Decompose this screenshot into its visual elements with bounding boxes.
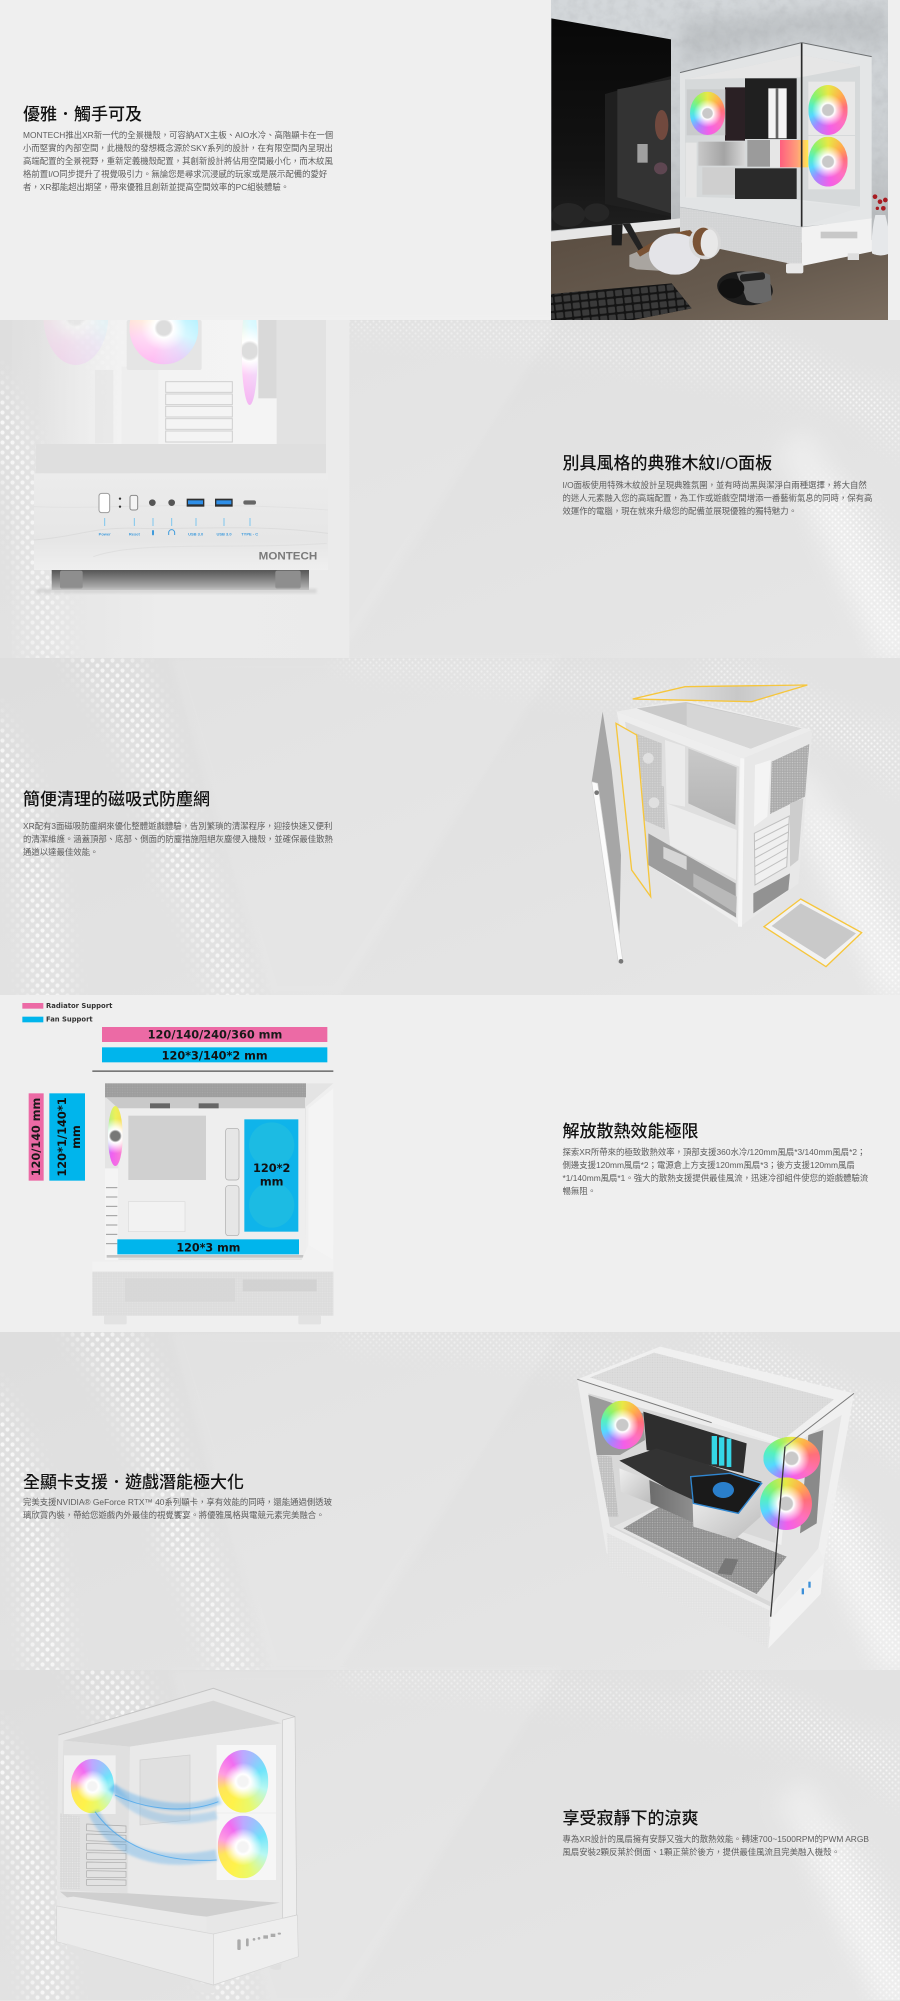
I/O ports xyxy=(99,493,258,537)
section 4 heading: 解放散熱效能極限 xyxy=(562,1122,698,1141)
expansion slots xyxy=(87,1824,126,1885)
section 2 body text: 效運作的電腦，現在就來升級您的配備並展現優雅的獨特魅力。 xyxy=(562,506,797,516)
airflow streams xyxy=(93,1787,220,1860)
top radiator bar: 120/140/240/360 mm xyxy=(148,1027,282,1041)
rgb fans xyxy=(690,92,725,135)
rear fans xyxy=(636,733,662,787)
bottom fan bar xyxy=(117,1239,299,1254)
section 5 body text: 完美支援NVIDIA® GeForce RTX™ 40系列顯卡，享有效能的同時，還能通過側透玻 xyxy=(23,1497,332,1507)
wall xyxy=(551,0,888,240)
glass corner xyxy=(800,43,802,227)
feet xyxy=(786,263,803,273)
expansion brackets xyxy=(166,382,232,442)
wood grain front panel xyxy=(34,473,328,570)
yellow side dust filter xyxy=(616,723,651,897)
side fan block: 120*2 xyxy=(253,1161,290,1175)
section 6 heading: 享受寂靜下的涼爽 xyxy=(562,1809,698,1828)
case interior xyxy=(37,267,326,444)
section 2 heading: 別具風格的典雅木紋I/O面板 xyxy=(562,454,772,473)
MONTECH logo: MONTECH xyxy=(259,550,317,562)
section 4 body text: *1/140mm風扇*1。強大的散熱支援提供最佳風流，迅速冷卻組件使您的遊戲體驗流 xyxy=(562,1173,868,1183)
rear fan bar: mm xyxy=(69,1125,83,1149)
lower motherboard and brackets xyxy=(735,168,797,199)
side fan panels xyxy=(687,89,725,135)
rgb fans xyxy=(601,1401,820,1530)
PC case xyxy=(680,43,872,273)
side fan block: mm xyxy=(260,1174,283,1188)
keyboard xyxy=(551,283,692,320)
section 1 body text: 格前置I/O同步提升了視覺吸引力。無論您是尋求沉浸感的玩家或是展示配備的愛好 xyxy=(23,169,327,179)
section 1 heading: 優雅．觸手可及 xyxy=(23,105,142,124)
section 1 body text: MONTECH推出XR新一代的全景機殼，可容納ATX主板、AIO水冷、高階顯卡在一個 xyxy=(23,130,333,140)
rear radiator bar: 120/140 mm xyxy=(29,1098,43,1176)
fan panels xyxy=(64,1745,276,1880)
image: case with three fans and airflow xyxy=(56,1688,298,1993)
section 4 body text xyxy=(562,1147,868,1196)
I/O ports: USB 3.0 xyxy=(188,532,204,537)
I/O ports: Power xyxy=(99,532,111,537)
case underside and feet xyxy=(37,570,317,593)
graphics card xyxy=(698,142,745,166)
floor mesh xyxy=(613,1505,807,1603)
top radiator bar xyxy=(102,1027,327,1042)
motherboard xyxy=(725,87,745,141)
vase with red flowers xyxy=(872,194,888,256)
fan frame xyxy=(127,320,202,370)
image: exploded case with magnetic dust filters xyxy=(592,684,863,968)
top fan bar xyxy=(102,1047,327,1062)
case interior xyxy=(617,712,743,927)
section 1 body text: 小而堅實的內部空間，此機殼的發想概念源於SKY系列的設計，在有限空間內呈現出 xyxy=(23,143,333,153)
base mesh xyxy=(680,207,802,266)
base mesh section xyxy=(92,1272,333,1324)
section 2 body text xyxy=(562,480,872,516)
case side view xyxy=(92,1070,333,1273)
case rear xyxy=(740,730,812,927)
graphics card xyxy=(619,1448,762,1539)
section 6 body text: 風扇安裝2顆反葉於側面、1顆正葉於後方，提供最佳風流且完美融入機殼。 xyxy=(562,1847,840,1857)
section 1 body text: 者，XR都能超出期望，帶來優雅且創新並提高空間效率的PC組裝體驗。 xyxy=(23,182,289,192)
case base xyxy=(57,1897,298,1993)
case base xyxy=(607,1533,825,1648)
lower case strip xyxy=(36,444,326,473)
section 3 heading: 簡便清理的磁吸式防塵網 xyxy=(23,790,210,809)
rear fan bar: 120*1/140*1 xyxy=(55,1097,69,1177)
image: wood grain front I/O panel xyxy=(34,320,349,658)
section 1 body text: 高端配置的全景視野，重新定義機殼配置，其創新設計將佔用空間最小化，而木紋風 xyxy=(23,156,333,166)
side rgb fan xyxy=(108,1106,123,1166)
legend: fan support xyxy=(22,1016,93,1024)
RAM modules xyxy=(712,1436,731,1467)
case top xyxy=(617,699,812,758)
monitor xyxy=(551,18,671,251)
rear fan bar xyxy=(49,1093,85,1181)
mouse xyxy=(717,271,773,306)
monitor shelf xyxy=(551,218,680,242)
I/O ports: USB 3.0 xyxy=(216,532,232,537)
wooden table xyxy=(551,227,888,320)
section 3 body text xyxy=(23,820,333,857)
section 1 body text xyxy=(23,130,333,192)
section 3 body text: 通道以達最佳效能。 xyxy=(23,847,98,857)
side fan block xyxy=(244,1119,298,1232)
section 4 legend and cooling diagram xyxy=(22,1002,334,1324)
image: case with full-size graphics card xyxy=(577,1346,854,1648)
section 6 body text xyxy=(562,1834,869,1857)
case body xyxy=(57,1688,297,1937)
section 3 body text: 的清潔維護。涵蓋頂部、底部、側面的防塵措施阻絕灰塵侵入機殼，並確保最佳散熱 xyxy=(23,834,333,844)
section 2 body text: I/O面板使用特殊木紋設計呈現典雅氛圍，並有時尚黑與潔淨白兩種選擇，將大自然 xyxy=(562,480,867,490)
section 4 body text: 側邊支援120mm風扇*2；電源倉上方支援120mm風扇*3；後方支援120mm風扇 xyxy=(562,1160,855,1170)
pastel fans xyxy=(43,267,108,365)
top fan bar: 120*3/140*2 mm xyxy=(162,1048,268,1062)
bottom fan bar: 120*3 mm xyxy=(176,1240,240,1254)
front io xyxy=(821,232,857,238)
rgb fans xyxy=(71,1750,268,1878)
photo: white PC case on desk with monitor xyxy=(551,0,888,320)
section 5 body text xyxy=(23,1497,332,1520)
yellow bottom dust filter xyxy=(764,899,862,967)
section 5 body text: 璃欣賞內裝，帶給您遊戲內外最佳的視覺饗宴。將優雅風格與電競元素完美融合。 xyxy=(23,1510,324,1520)
section 6 body text: 專為XR設計的風扇擁有安靜又強大的散熱效能。轉速700~1500RPM的PWM ARGB xyxy=(562,1834,869,1844)
glass edges xyxy=(577,1379,854,1617)
I/O ports: TYPE - C xyxy=(241,532,258,537)
section 3 body text: XR配有3面磁吸防塵網來優化整體遊戲體驗，告別繁瑣的清潔程序，迎接快速又便利 xyxy=(23,820,332,830)
case shell xyxy=(577,1347,854,1627)
section 4 body text: 探索XR所帶來的極致散熱效率，頂部支援360水冷/120mm風扇*3/140mm風扇*2； xyxy=(562,1147,865,1157)
I/O ports: Reset xyxy=(129,532,140,537)
headphones xyxy=(629,226,721,275)
section 5 heading: 全顯卡支援．遊戲潛能極大化 xyxy=(23,1473,244,1492)
legend: fan support: Fan Support xyxy=(46,1016,93,1024)
case interior xyxy=(588,1393,842,1607)
legend: radiator support: Radiator Support xyxy=(46,1002,113,1010)
yellow top dust filter xyxy=(633,685,807,702)
section 4 body text: 暢無阻。 xyxy=(562,1186,596,1196)
side panel with hinge xyxy=(592,712,623,964)
section 2 body text: 的迷人元素融入您的高端配置，為工作或遊戲空間增添一番藝術氣息的同時，保有高 xyxy=(562,493,872,503)
